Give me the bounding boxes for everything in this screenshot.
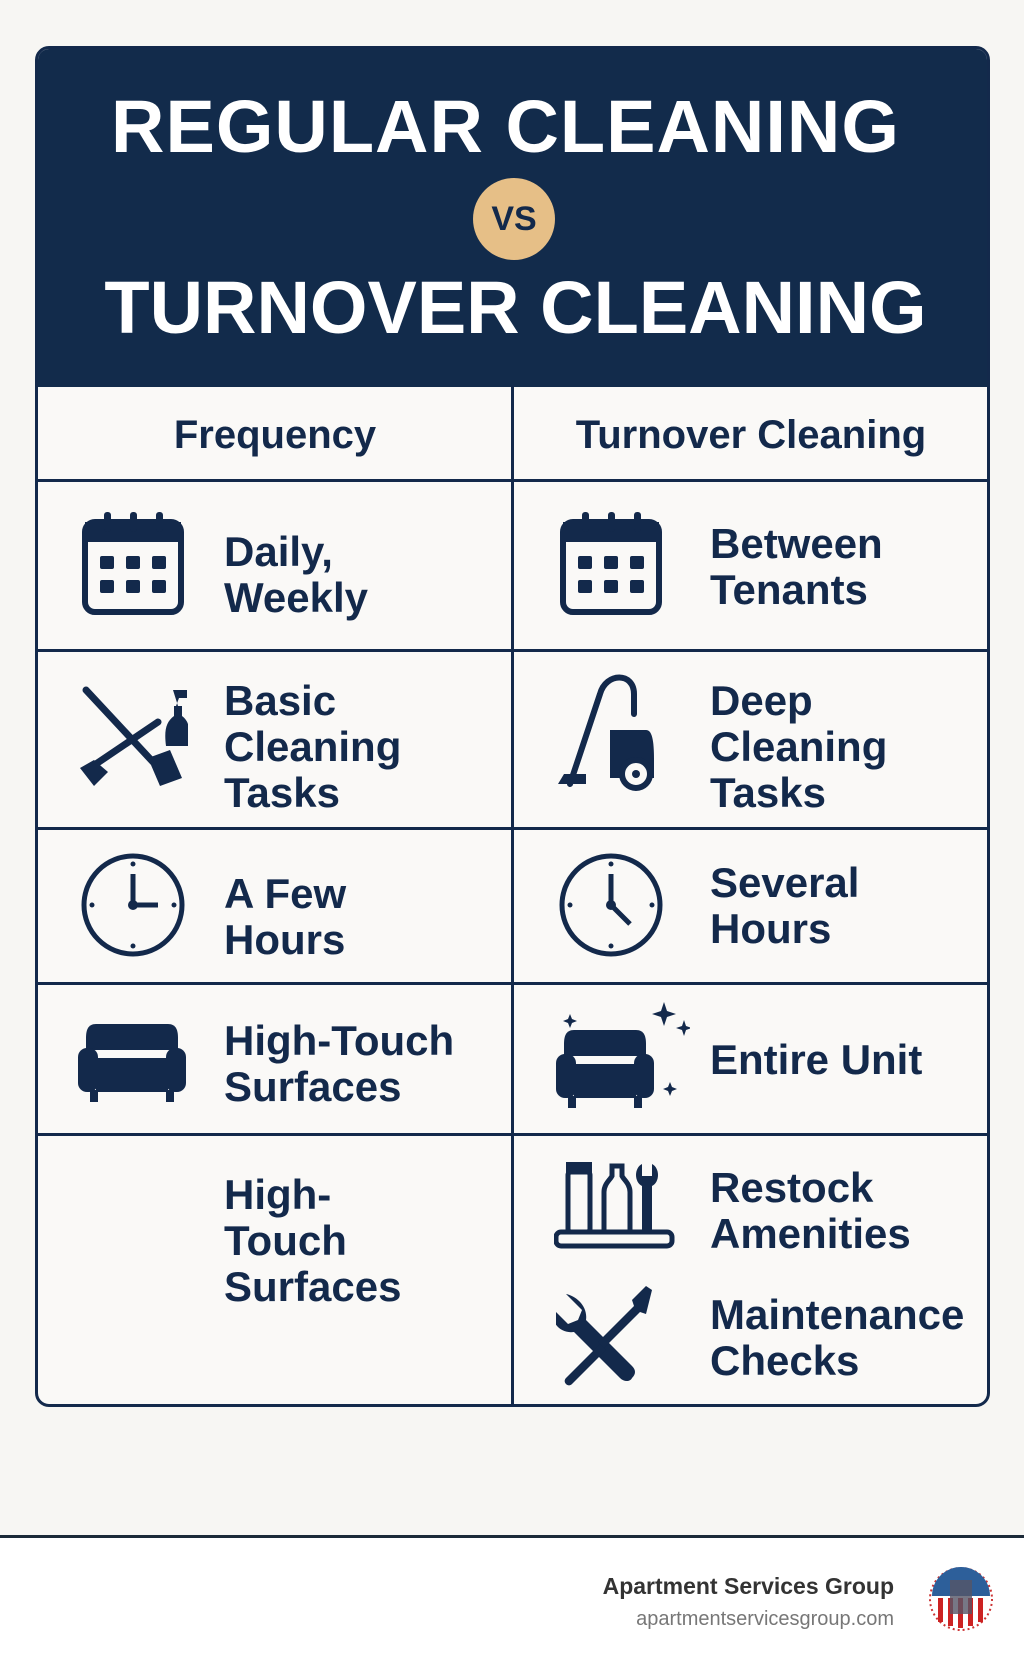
text: Between Tenants: [710, 520, 883, 613]
text: High-Touch Surfaces: Surfaces: [224, 1063, 401, 1110]
icon: armchair left: [78, 1024, 186, 1102]
text: Basic Cleaning Tasks: Tasks: [224, 769, 340, 816]
icon: clock left: [82, 854, 184, 956]
text: Deep Cleaning Tasks: Cleaning: [710, 723, 887, 770]
title line 2: TURNOVER CLEANING: [104, 266, 927, 349]
text: Restock Amenities: [710, 1164, 911, 1257]
header cell: Turnover Cleaning: Turnover Cleaning: [576, 413, 926, 457]
text: High-Touch Surfaces: [224, 1017, 454, 1110]
text: Deep Cleaning Tasks: [710, 677, 887, 816]
text: Maintenance Checks: [710, 1291, 964, 1384]
text: Restock Amenities: Amenities: [710, 1210, 911, 1257]
icon: broom and spray: [80, 686, 188, 786]
header banner: [38, 49, 993, 387]
text: High- Touch Surfaces: Surfaces: [224, 1263, 401, 1310]
header cell: Frequency: Frequency: [174, 413, 376, 457]
footer brand text: [603, 1573, 894, 1630]
text: Daily, Weekly: Weekly: [224, 574, 368, 621]
text: Basic Cleaning Tasks: Cleaning: [224, 723, 401, 770]
text: High- Touch Surfaces: Touch: [224, 1217, 347, 1264]
text: Entire Unit: Entire Unit: [710, 1036, 922, 1083]
text: High- Touch Surfaces: High-: [224, 1171, 331, 1218]
footer divider: [0, 1535, 1024, 1538]
text: Several Hours: [710, 859, 859, 952]
text: Deep Cleaning Tasks: Deep: [710, 677, 813, 724]
text: Daily, Weekly: Daily,: [224, 528, 333, 575]
icon: vacuum: [558, 674, 654, 791]
icon: clock right: [560, 854, 662, 956]
icon: calendar right: [560, 512, 662, 615]
icon: wrench and screwdriver: [556, 1286, 652, 1386]
text: Restock Amenities: Restock: [710, 1164, 873, 1211]
vs badge: VS: [491, 200, 537, 238]
icon: armchair with sparkles: [556, 1002, 690, 1108]
title line 1: REGULAR CLEANING: [111, 85, 900, 168]
text: Maintenance Checks: Checks: [710, 1337, 859, 1384]
text: High- Touch Surfaces: [224, 1171, 401, 1310]
card panel: [35, 46, 990, 1407]
icon: calendar left: [82, 512, 184, 615]
text: Between Tenants: Tenants: [710, 566, 868, 613]
text: Between Tenants: Between: [710, 520, 883, 567]
footer brand text: Apartment Services Group: [603, 1573, 894, 1599]
icon: amenities tray: [554, 1162, 674, 1248]
text: High-Touch Surfaces: High-Touch: [224, 1017, 454, 1064]
text: Basic Cleaning Tasks: Basic: [224, 677, 336, 724]
text: Daily, Weekly: [224, 528, 368, 621]
text: A Few Hours: Hours: [224, 916, 345, 963]
logo badge: [929, 1567, 993, 1631]
text: Several Hours: Several: [710, 859, 859, 906]
footer brand text: apartmentservicesgroup.com: [636, 1608, 894, 1630]
text: Basic Cleaning Tasks: [224, 677, 401, 816]
text: A Few Hours: A Few: [224, 870, 346, 917]
text: Several Hours: Hours: [710, 905, 831, 952]
vs badge: [473, 178, 555, 260]
text: Maintenance Checks: Maintenance: [710, 1291, 964, 1338]
text: A Few Hours: [224, 870, 346, 963]
text: Deep Cleaning Tasks: Tasks: [710, 769, 826, 816]
table grid lines: [35, 479, 990, 482]
